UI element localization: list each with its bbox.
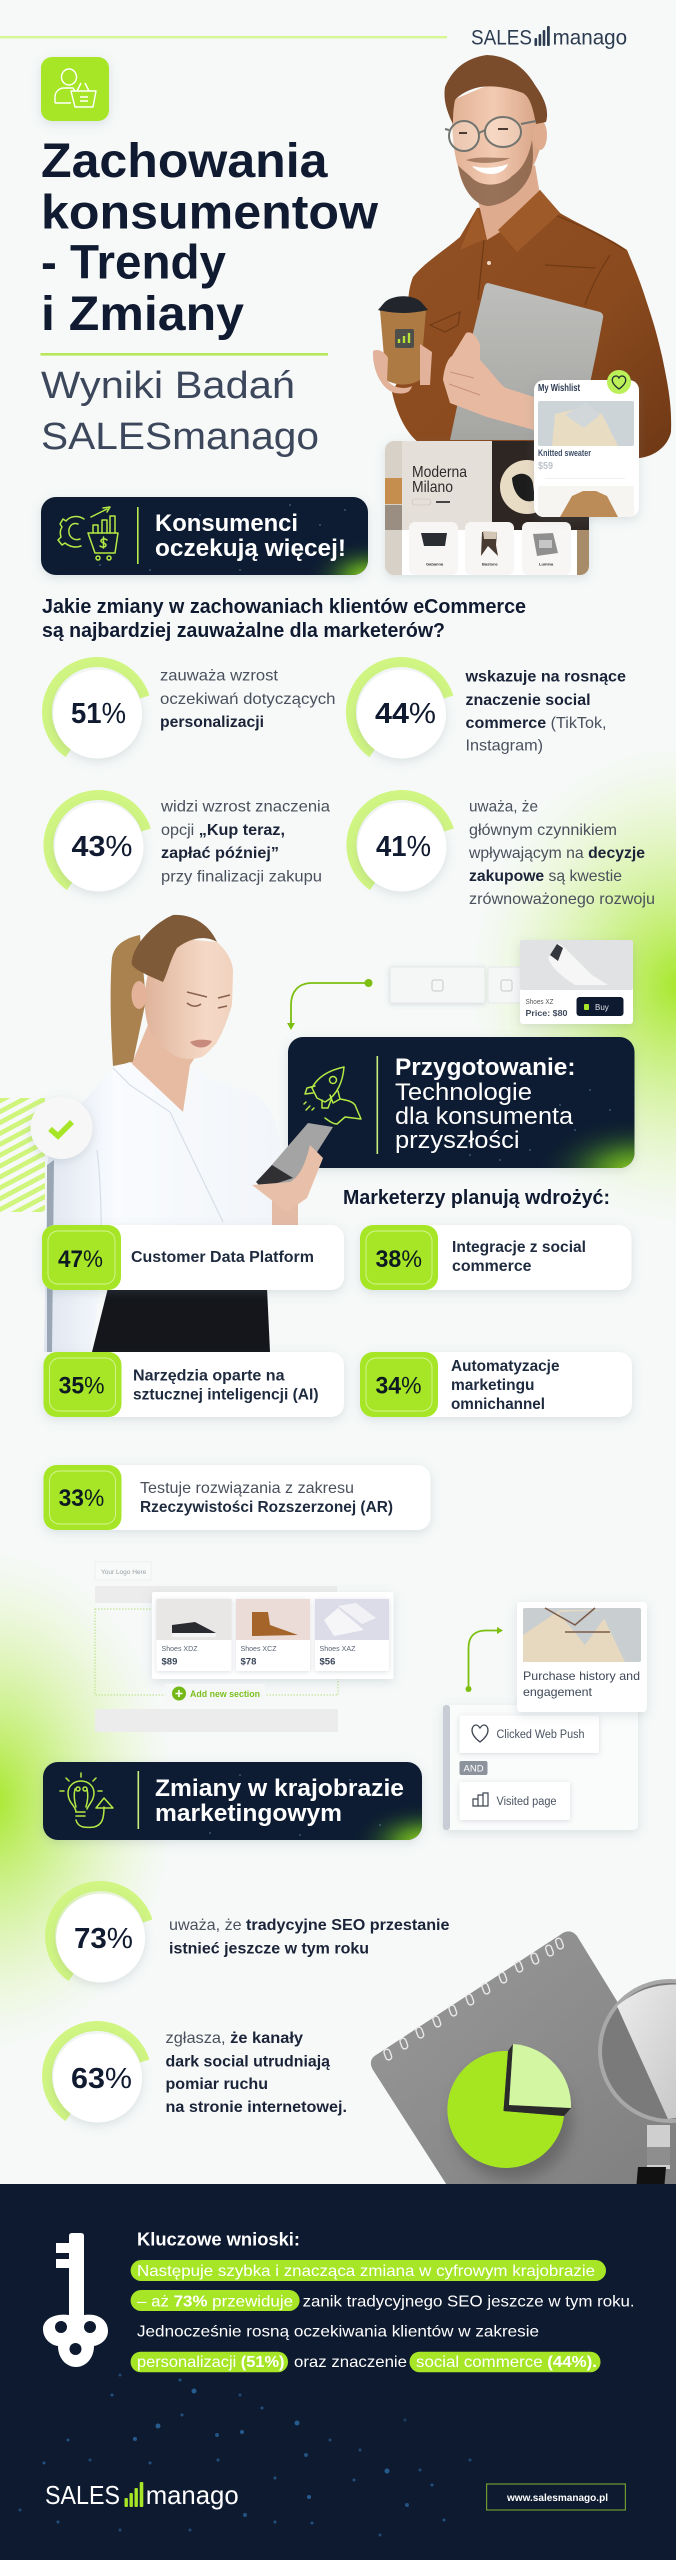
logo placeholder: Your Logo Here <box>101 1569 147 1576</box>
arrow: to purchase card <box>466 1627 503 1692</box>
condition operator AND: AND <box>464 1764 484 1774</box>
stat: 44%: 44% <box>375 698 436 730</box>
website button <box>487 2484 625 2510</box>
card: purchase history and engagement <box>517 1602 647 1712</box>
woman: eyes <box>187 992 230 1008</box>
stat: 63%: zgłasza, że kanały <box>166 2030 303 2047</box>
woman: skirt <box>92 1288 270 1352</box>
man: neck <box>478 165 540 240</box>
title: - Trendy <box>41 237 226 290</box>
stat: 41%: głównym czynnikiem <box>469 822 617 839</box>
notebook <box>371 1931 676 2190</box>
card: 34%: Automatyzacje <box>451 1358 560 1375</box>
condition: Clicked Web Push <box>460 1716 599 1753</box>
card: 34%: 34% <box>376 1373 422 1400</box>
stat: 63%: dark social utrudniają <box>166 2054 330 2070</box>
stat: 63%: 63% <box>71 2063 132 2095</box>
icon: key <box>43 2233 108 2367</box>
product card: Shoes XZ: Buy <box>595 1003 609 1012</box>
stat: 41%: zakupowe są kwestie <box>469 868 622 885</box>
product: Shoes XCZ <box>236 1599 310 1671</box>
magnifier <box>598 1979 676 2190</box>
heading: Kluczowe wnioski: Kluczowe wnioski: <box>137 2230 300 2250</box>
card: 47% <box>42 1225 344 1290</box>
stat: 43%: 43% <box>72 831 132 863</box>
segment conditions card <box>443 1705 638 1830</box>
background glow: right <box>470 745 676 1225</box>
stat: 44%: commerce (TikTok, <box>466 715 606 732</box>
illustration: notebook, pie chart and magnifier <box>371 1931 676 2190</box>
heading: Marketerzy planują wdrożyć: Marketerzy planują wdrożyć: <box>343 1187 610 1209</box>
check badge <box>30 1097 92 1159</box>
website button: www.salesmanago.pl <box>506 2492 608 2504</box>
card: 35%: Narzędzia oparte na <box>133 1368 285 1385</box>
placeholder image boxes <box>390 967 528 1003</box>
logo: SALESmanago footer: manago <box>146 2480 239 2510</box>
card: 34%: marketingu <box>451 1377 534 1394</box>
man: face <box>452 80 543 206</box>
product: Shoes XCZ: $78 <box>240 1656 256 1668</box>
stat: 43%: opcji „Kup teraz, <box>161 822 285 839</box>
woman: ponytail <box>111 935 146 1066</box>
product card: Shoes XZ: Price: $80 <box>526 1008 568 1018</box>
stat: 63% <box>47 2026 347 2122</box>
stat: 41%: wpływającym na decyzje <box>468 845 645 862</box>
banner: Konsumenci oczekują więcej <box>38 497 370 580</box>
mockup: Moderna Milano web page <box>385 441 589 575</box>
key takeaways text <box>131 2260 635 2372</box>
woman: face <box>145 938 233 1059</box>
card: 38% <box>360 1225 632 1290</box>
illustration: man with laptop and coffee <box>373 55 671 458</box>
man: ear <box>533 120 547 150</box>
icon: light bulb with arrow <box>60 1773 113 1827</box>
stat: 44% <box>351 662 626 758</box>
subtitle: Wyniki Badań <box>41 365 295 407</box>
product card: Shoes XZ: Shoes XZ <box>526 999 554 1006</box>
subtitle: SALESmanago <box>41 416 319 458</box>
card: 35% <box>44 1352 344 1417</box>
product: Shoes XDZ <box>156 1599 232 1671</box>
icon: gear and shopping cart <box>58 507 118 560</box>
product row <box>152 1592 394 1679</box>
woman: hair <box>132 915 217 982</box>
product: Shoes XAZ <box>315 1599 389 1671</box>
card: My Wishlist: Knitted sweater <box>538 448 591 458</box>
footer panel <box>0 2184 676 2560</box>
card: 34% <box>360 1352 632 1417</box>
product: Shoes XAZ: $56 <box>320 1656 335 1668</box>
background glow: left <box>0 1550 175 2050</box>
stat: 41%: 41% <box>376 831 431 863</box>
stat: 51%: personalizacji <box>160 714 264 731</box>
stat: 51%: oczekiwań dotyczących <box>160 691 336 708</box>
card: 38%: 38% <box>376 1246 422 1273</box>
add new section button: Add new section <box>190 1689 260 1700</box>
man: laptop <box>450 283 603 440</box>
mockup: Moderna Milano web page: Bastone <box>482 562 499 566</box>
heading: survey question <box>42 596 526 642</box>
icon: heart badge <box>607 370 631 394</box>
woman: mouth <box>190 1040 212 1048</box>
man: finger lines <box>449 372 480 395</box>
banner text: Przygotowanie: <box>395 1054 576 1081</box>
banner text: Zmiany w krajobrazie <box>155 1775 404 1802</box>
title: i Zmiany <box>41 288 244 341</box>
logo: SALESmanago footer: SALES <box>45 2480 120 2510</box>
card: 38%: commerce <box>452 1258 532 1275</box>
stat: 63%: pomiar ruchu <box>166 2076 268 2093</box>
man: forearm and hand <box>443 332 534 430</box>
heading: survey question: są najbardziej zauważalne dla marketerów? <box>42 620 445 642</box>
decorative stripes <box>0 1098 45 1212</box>
logo: SALESmanago header <box>471 26 627 50</box>
condition: Visited page: Visited page <box>496 1796 556 1808</box>
heading: survey question: Jakie zmiany w zachowaniach klientów eCommerce <box>42 596 526 618</box>
card: 35%: sztucznej inteligencji (AI) <box>133 1387 318 1404</box>
header rule <box>0 36 447 38</box>
card: purchase history and engagement: engagement <box>523 1685 593 1699</box>
card: 47%: Customer Data Platform <box>131 1249 314 1266</box>
banner text: oczekują więcej! <box>155 535 346 562</box>
man: glasses <box>445 117 536 151</box>
man: collar <box>460 190 560 252</box>
key takeaways text: oraz znaczenie <box>294 2354 407 2371</box>
logo: SALESmanago footer <box>45 2480 239 2510</box>
card: purchase history and engagement: Purchase history and <box>523 1669 640 1683</box>
product: Shoes XAZ: Shoes XAZ <box>320 1644 356 1653</box>
product: Shoes XDZ: $89 <box>162 1656 177 1668</box>
stat: 41% <box>351 795 655 908</box>
card: My Wishlist: $59 <box>538 461 553 472</box>
stat: 43%: zapłać później” <box>161 845 279 862</box>
banner text <box>395 1054 576 1154</box>
woman: forearm <box>272 1200 298 1230</box>
stat: 44%: znaczenie social <box>466 692 590 709</box>
product: Shoes XDZ: Shoes XDZ <box>162 1644 198 1653</box>
stat: 41%: uważa, że <box>469 799 538 816</box>
subtitle <box>41 365 319 458</box>
key takeaways text: zanik tradycyjnego SEO jeszcze w tym roku. <box>303 2294 635 2311</box>
man: smile <box>472 164 508 174</box>
card: 33%: 33% <box>59 1485 104 1512</box>
woman: hand <box>252 1145 323 1212</box>
stat: 73%: uważa, że tradycyjne SEO przestanie <box>169 1917 450 1934</box>
stat: 51%: zauważa wzrost <box>160 668 279 685</box>
card: 33%: Rzeczywistości Rozszerzonej (AR) <box>140 1499 393 1516</box>
banner text: Technologie <box>395 1079 532 1106</box>
condition: Visited page <box>460 1782 570 1820</box>
key takeaways text: personalizacji (51%) <box>137 2354 284 2371</box>
icon: rocket launched by finger <box>304 1067 361 1124</box>
man: shirt seams <box>430 215 625 332</box>
stat: 44%: Instagram) <box>466 738 543 755</box>
condition operator AND <box>460 1761 488 1775</box>
logo: SALESmanago header: manago <box>553 27 627 50</box>
title: konsumentow <box>41 187 379 240</box>
product card: Shoes XZ <box>520 940 633 1024</box>
man: eyes <box>459 129 508 133</box>
card: 33% <box>44 1465 430 1530</box>
banner: Zmiany w krajobrazie marketingowym <box>41 1762 424 1846</box>
condition: Clicked Web Push: Clicked Web Push <box>496 1729 584 1741</box>
mockup: Moderna Milano web page: Moderna <box>412 464 467 481</box>
illustration: woman with phone <box>44 915 333 1352</box>
stat: 43%: przy finalizacji zakupu <box>161 869 322 886</box>
key takeaways text: social commerce (44%). <box>416 2354 597 2371</box>
mockup: Moderna Milano web page: Milano <box>412 479 453 496</box>
banner text: dla konsumenta <box>395 1103 574 1130</box>
banner text <box>155 1775 404 1827</box>
banner text: przyszłości <box>395 1127 520 1154</box>
footer particle field <box>18 2374 472 2536</box>
woman: shirt <box>44 1062 281 1352</box>
banner text: Konsumenci <box>155 510 298 537</box>
card: 33%: Testuje rozwiązania z zakresu <box>140 1480 354 1497</box>
stat: 41%: zrównoważonego rozwoju <box>469 891 655 908</box>
title: Zachowania <box>41 135 328 188</box>
woman: neck <box>130 1020 200 1112</box>
stat: 73%: istnieć jeszcze w tym roku <box>169 1940 369 1958</box>
woman: shirt details <box>97 1068 223 1288</box>
woman: ear <box>132 981 146 1009</box>
man: stubble beard <box>458 140 533 206</box>
card: 35%: 35% <box>59 1373 105 1400</box>
logo: SALESmanago header: SALES <box>471 27 532 50</box>
card: 47%: 47% <box>58 1246 103 1273</box>
key takeaways text: – aż 73% przewiduje <box>137 2294 293 2311</box>
man: hair <box>444 55 547 124</box>
product: Shoes XCZ: Shoes XCZ <box>240 1644 277 1653</box>
card: 38%: Integracje z social <box>452 1239 586 1256</box>
stat: 51%: 51% <box>71 698 126 730</box>
card: 34%: omnichannel <box>451 1396 545 1413</box>
man: mustache <box>466 158 510 163</box>
man: button <box>487 261 491 265</box>
stat: 43%: widzi wzrost znaczenia <box>160 799 330 816</box>
title divider <box>40 353 328 356</box>
title <box>41 135 379 341</box>
man: shirt <box>392 190 671 458</box>
icon: customer with basket <box>41 57 109 121</box>
mockup: Moderna Milano web page: Lumina <box>539 562 554 566</box>
arrow: to banner <box>287 979 372 1030</box>
mockup: email builder <box>95 1562 394 1732</box>
card: My Wishlist <box>534 380 639 517</box>
stat: 73% <box>50 1886 450 1982</box>
man: coffee cup <box>378 296 428 384</box>
logo placeholder <box>95 1562 151 1580</box>
banner text: marketingowym <box>155 1800 342 1827</box>
mockup: Moderna Milano web page: Gabanna <box>426 562 444 566</box>
woman: phone <box>257 1123 333 1188</box>
stat: 63%: na stronie internetowej. <box>166 2099 347 2116</box>
stat: 51% <box>47 662 336 758</box>
stat: 43% <box>48 795 330 892</box>
stat: 73%: 73% <box>74 1923 133 1955</box>
notebook: spiral rings <box>383 1937 564 2061</box>
banner: Przygotowanie <box>286 1037 637 1174</box>
card: My Wishlist: My Wishlist <box>538 383 581 394</box>
woman: sleeve shadow <box>47 1160 54 1352</box>
stat: 44%: wskazuje na rosnące <box>464 669 626 686</box>
key takeaways text: Jednocześnie rosną oczekiwania klientów w zakresie <box>137 2324 539 2341</box>
pie chart <box>447 2044 572 2180</box>
man: hand holding cup <box>373 344 432 393</box>
key takeaways text: Następuje szybka i znacząca zmiana w cyfrowym krajobrazie <box>137 2263 595 2280</box>
banner text <box>155 510 346 562</box>
add new section button <box>165 1684 265 1702</box>
